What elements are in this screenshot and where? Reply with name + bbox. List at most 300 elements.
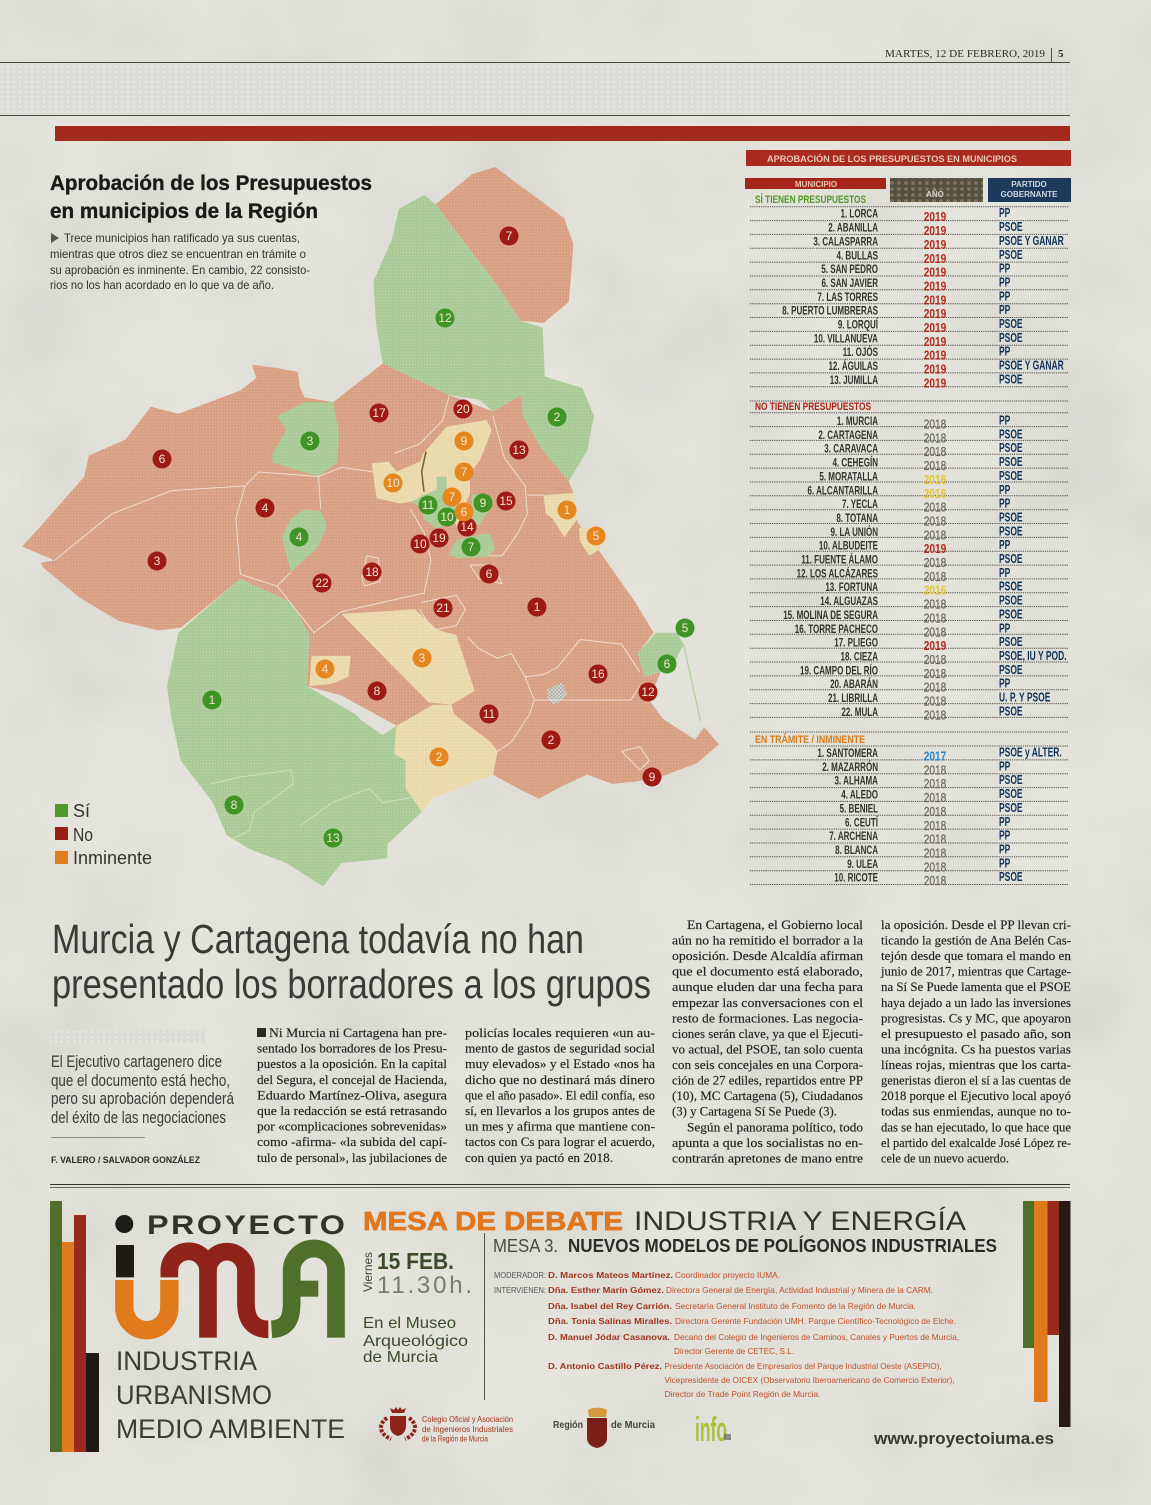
number markers: Inminente	[316, 432, 606, 766]
colegio text: de Ingenieros Industriales	[422, 1425, 513, 1434]
governing parties: PP	[999, 539, 1010, 553]
governing parties: PP	[999, 843, 1010, 857]
municipality names: 8. PUERTO LUMBRERAS	[782, 305, 878, 318]
header: partido gobernante: GOBERNANTE	[1001, 190, 1058, 199]
article column 4: cele de un nuevo acuerdo.	[881, 1150, 1009, 1165]
number markers: No: 19	[432, 531, 446, 545]
map legend: Sí	[73, 801, 90, 821]
governing parties: PSOE	[999, 580, 1023, 594]
municipality names: 8. TOTANA	[836, 513, 878, 525]
map intro text: Trece municipios han ratificado ya sus cuentas,	[64, 231, 300, 245]
article subhead: del éxito de las negociaciones	[51, 1109, 226, 1127]
municipality names: 6. ALCANTARILLA	[807, 485, 878, 498]
article column 2: policías locales requieren «un au-	[465, 1025, 655, 1040]
municipality names: 6. CEUTÍ	[845, 817, 878, 830]
municipality names: 10. ALBUDEITE	[819, 540, 878, 553]
municipality names: 2. ABANILLA	[828, 222, 878, 235]
number markers: No: 11	[483, 707, 496, 721]
budget years: 2018	[924, 791, 946, 805]
budget years: 2019	[924, 362, 947, 377]
number markers: Inminente: 2	[436, 750, 443, 764]
number markers: Sí: 9	[480, 496, 487, 510]
municipality names: 12. ÁGUILAS	[828, 361, 878, 374]
logo: región de murcia	[553, 1408, 655, 1448]
article column 4: generistas dieron el sí a las cuentas de	[881, 1073, 1071, 1088]
byline: F. VALERO / SALVADOR GONZÁLEZ	[51, 1155, 200, 1166]
article column 1: como -afirma- «la subida del capí-	[257, 1134, 447, 1149]
governing parties: PP	[999, 345, 1010, 359]
governing parties: PP	[999, 304, 1010, 318]
municipal borders	[54, 395, 649, 840]
number markers: Inminente: 9	[461, 434, 468, 448]
logo: colegio de ingenieros crest	[381, 1407, 415, 1439]
San Javier and San Pedro	[638, 633, 684, 677]
number markers: Sí: 1	[209, 693, 216, 707]
panel title: NUEVOS MODELOS DE POLÍGONOS INDUSTRIALES	[568, 1235, 997, 1256]
budget years: 2018	[924, 528, 946, 543]
municipality names: 13. FORTUNA	[825, 582, 878, 595]
municipality names: 16. TORRE PACHECO	[795, 624, 878, 636]
article headline: presentado los borradores a los grupos	[52, 961, 651, 1007]
governing parties: PSOE	[999, 788, 1023, 802]
municipality names: 2. MAZARRÓN	[822, 760, 878, 774]
article column 2: un mes y afirma que mantiene con-	[465, 1119, 655, 1134]
number markers: No: 21	[436, 601, 450, 615]
governing parties: PP	[999, 857, 1010, 871]
budget years: 2016	[924, 473, 947, 487]
budget years: 2018	[924, 445, 946, 460]
article column 3	[672, 917, 864, 1165]
budget years: 2016	[924, 584, 947, 598]
article column 1: puestos a la oposición. En la capital	[257, 1056, 447, 1071]
article column 4: tejón desde que tomara el mando en	[881, 948, 1071, 963]
table title bar: APROBACIÓN DE LOS PRESUPUESTOS EN MUNICIPIOS	[767, 153, 1017, 165]
Santomera	[543, 493, 578, 537]
event venue	[363, 1315, 468, 1366]
budget years: 2019	[924, 307, 947, 322]
governing parties: PSOE	[999, 608, 1023, 622]
article column 2: dicho que no destinará más dinero	[465, 1072, 655, 1087]
event date: 15 FEB.	[377, 1248, 454, 1274]
municipality names: 7. YECLA	[842, 499, 878, 512]
Abanilla	[521, 377, 594, 481]
municipality names: 12. LOS ALCÁZARES	[797, 568, 878, 581]
governing parties: PSOE y ALTER.	[999, 746, 1062, 760]
governing parties: PP	[999, 566, 1010, 580]
Mazarrón	[394, 705, 498, 812]
article column 2: que el año pasado». El edil confía, eso	[465, 1087, 655, 1102]
governing parties: PSOE	[999, 317, 1023, 332]
map intro text	[50, 231, 310, 292]
article subhead: que el documento está hecho,	[51, 1072, 230, 1090]
Lorca, Puerto Lumbreras, Águilas	[167, 579, 422, 886]
number markers: No: 3	[154, 554, 161, 568]
speakers: Dña. Esther Marín Gómez.	[548, 1285, 664, 1295]
speakers: D. Manuel Jódar Casanova.	[548, 1332, 670, 1342]
Jumilla	[374, 195, 545, 411]
municipality names: 5. MORATALLA	[819, 471, 878, 484]
budget years: 2018	[924, 570, 946, 584]
logo: proyecto iuma: PROYECTO	[147, 1210, 345, 1240]
logo: región de murcia: Región	[553, 1420, 583, 1431]
number markers: Inminente: 7	[461, 465, 468, 479]
logo taglines	[116, 1346, 345, 1444]
municipality names: 3. ALHAMA	[835, 775, 878, 788]
number markers: No: 17	[372, 406, 386, 420]
number markers: Inminente: 6	[461, 505, 468, 519]
budget years: 2019	[924, 639, 947, 653]
page header: halftone band, rules, date and folio	[0, 48, 1070, 116]
article column 4: 2018 porque el Ejecutivo local apoyó	[881, 1088, 1071, 1103]
Yecla	[436, 167, 573, 323]
budget years: 2018	[924, 694, 946, 709]
logo: info	[695, 1411, 731, 1449]
number markers: No: 2	[548, 733, 555, 747]
Las Torres	[448, 533, 495, 558]
budget years: 2018	[924, 805, 946, 819]
number markers: No: 13	[512, 443, 526, 457]
number markers: No: 18	[365, 565, 379, 579]
page number: 5	[1058, 48, 1064, 60]
budget years: 2019	[924, 542, 947, 557]
speakers: Director de Trade Point Región de Murcia.	[664, 1390, 820, 1399]
municipality names: 10. VILLANUEVA	[814, 333, 878, 346]
governing parties: U. P. Y PSOE	[999, 691, 1050, 705]
municipality names: 1. MURCIA	[837, 416, 878, 428]
speakers: Directora Gerente Fundación UMH. Parque Científico-Tecnológico de Elche.	[675, 1317, 956, 1326]
article subhead: El Ejecutivo cartagenero dice	[51, 1053, 222, 1071]
colegio text: Colegio Oficial y Asociación	[422, 1415, 513, 1424]
article headline: Murcia y Cartagena todavía no han	[52, 916, 584, 962]
speakers: D. Marcos Mateos Martínez.	[548, 1270, 673, 1280]
article column 3: Según el panorama político, todo	[687, 1119, 863, 1134]
municipality names: 20. ABARÁN	[830, 679, 878, 692]
budget years: 2017	[924, 749, 946, 764]
municipality names: 4. ALEDO	[841, 789, 878, 802]
governing parties: PSOE Y GANAR	[999, 234, 1064, 248]
article column 2: con quien ya pactó en 2018.	[465, 1150, 613, 1165]
logo: región de murcia: de Murcia	[611, 1420, 655, 1431]
municipality names: 17. PLIEGO	[834, 637, 878, 650]
governing parties: PP	[999, 262, 1010, 276]
section heading: en trámite: EN TRÁMITE / INMINENTE	[755, 733, 865, 746]
budget years: 2019	[924, 265, 947, 280]
municipality names: 19. CAMPO DEL RÍO	[800, 665, 878, 678]
number markers: No: 15	[499, 494, 513, 508]
article column 4: ticando la gestión de Ana Belén Cas-	[881, 933, 1071, 948]
budget years: 2018	[924, 819, 946, 833]
municipality names: 9. LA UNIÓN	[831, 525, 878, 539]
governing parties: PSOE	[999, 636, 1023, 650]
governing parties: PSOE	[999, 221, 1023, 235]
governing parties: PSOE	[999, 442, 1023, 456]
budget years: 2019	[924, 224, 947, 238]
article column 3: empezar las conversaciones con el	[672, 995, 863, 1010]
municipality names: 6. SAN JAVIER	[821, 278, 878, 290]
article column 3: (10), MC Cartagena (5), Ciudadanos	[672, 1088, 863, 1103]
speakers: Vicepresidente de OICEX (Observatorio Iberoamericano de Comercio Exterior),	[664, 1376, 954, 1385]
map title: Aprobación de los Presupuestos	[50, 172, 372, 195]
governing parties: PP	[999, 497, 1010, 511]
number markers: Sí	[202, 308, 694, 848]
municipality names: 2. CARTAGENA	[818, 430, 878, 442]
municipality names: 1. SANTOMERA	[817, 748, 878, 760]
municipality names: 5. SAN PEDRO	[821, 264, 878, 277]
number markers: Sí: 10	[440, 510, 454, 524]
governing parties	[999, 207, 1067, 885]
number markers: Sí: 11	[422, 498, 435, 512]
right colour stripes	[1023, 1201, 1070, 1427]
article subhead: pero su aprobación dependerá	[51, 1090, 235, 1108]
municipality names: 3. CALASPARRA	[813, 236, 878, 249]
article column 3: con seis concejales en una Corpora-	[672, 1057, 863, 1072]
number markers: No: 1	[534, 600, 541, 614]
logo taglines: URBANISMO	[116, 1380, 272, 1410]
number markers: Inminente: 3	[419, 651, 426, 665]
municipality names: 22. MULA	[841, 707, 878, 719]
municipality names: 11. OJÓS	[843, 346, 878, 360]
article column 4: líneas rojas, mientras que los carta-	[881, 1057, 1071, 1072]
event venue: de Murcia	[363, 1349, 438, 1366]
event venue: En el Museo	[363, 1315, 456, 1332]
Lorquí	[472, 493, 487, 525]
logo: info: info	[695, 1411, 727, 1449]
header: municipio: MUNICIPIO	[795, 180, 837, 189]
municipality names: 5. BENIEL	[840, 803, 878, 816]
budget years: 2018	[924, 667, 946, 681]
speakers: D. Antonio Castillo Pérez.	[548, 1361, 662, 1371]
governing parties: PP	[999, 622, 1010, 636]
panel: advertisement	[50, 1184, 1070, 1452]
number markers: Sí: 6	[664, 657, 671, 671]
Bullas	[282, 509, 327, 572]
budget years: 2019	[924, 238, 947, 252]
number markers: No: 6	[486, 567, 493, 581]
governing parties: PSOE	[999, 373, 1023, 387]
governing parties: PSOE	[999, 663, 1023, 677]
article column 3: resto de formaciones. Las negocia-	[672, 1010, 863, 1025]
budget years: 2019	[924, 321, 947, 335]
panel title: MESA 3.	[493, 1236, 558, 1256]
article column 3: contrarán apretones de mano entre	[672, 1150, 863, 1165]
Beniel	[579, 528, 601, 556]
central municipalities detail	[372, 420, 495, 558]
article column 3: aún no ha remitido el borrador a la	[672, 933, 863, 948]
map intro text: rios no los han acordado en lo que va de año.	[50, 278, 274, 292]
article column 1: tulo de personal», las jubilaciones de	[257, 1150, 447, 1165]
article column 3: vo actual, del PSOE, tan solo cuenta	[672, 1042, 863, 1056]
Aledo	[309, 656, 351, 686]
budget years	[924, 210, 947, 889]
number markers: Sí: 7	[468, 540, 475, 554]
budget years: 2018	[924, 500, 946, 515]
speakers: Decano del Colegio de Ingenieros de Caminos, Canales y Puertos de Murcia,	[674, 1333, 959, 1342]
article column 2: tactos con Cs para lograr el acuerdo,	[465, 1134, 655, 1149]
municipality names: 7. LAS TORRES	[817, 292, 878, 304]
municipality names: 9. LORQUÍ	[838, 319, 878, 332]
number markers: Inminente: 5	[593, 529, 600, 543]
municipality names: 18. CIEZA	[840, 651, 878, 664]
municipality names: 10. RICOTE	[834, 872, 878, 885]
governing parties: PP	[999, 760, 1010, 774]
map title: en municipios de la Región	[50, 200, 318, 223]
article column 4: el presupuesto el pasado año, son	[881, 1026, 1072, 1041]
number markers: Sí: 8	[231, 798, 238, 812]
article column 3: ciones serán clave, ya que el Ejecuti-	[672, 1026, 863, 1041]
article column 1: Ni Murcia ni Cartagena han pre-	[269, 1025, 447, 1040]
number markers: Inminente: 7	[449, 490, 456, 504]
budget years: 2018	[924, 874, 946, 889]
municipality names: 9. ULEA	[847, 859, 878, 871]
number markers: Sí: 13	[326, 831, 340, 845]
article column 3: apunta a que los socialistas no en-	[672, 1135, 863, 1150]
map legend	[55, 801, 152, 868]
header: año	[890, 178, 983, 202]
speakers: Coordinador proyecto IUMA.	[675, 1271, 780, 1280]
budget years: 2018	[924, 556, 946, 570]
municipality names: 7. ARCHENA	[829, 831, 878, 844]
budget years: 2019	[924, 210, 947, 225]
governing parties: PSOE	[999, 525, 1023, 539]
budget years: 2018	[924, 832, 946, 847]
article column 4: progresistas. Cs y MC, que apoyaron	[881, 1010, 1071, 1025]
budget years: 2018	[924, 653, 946, 667]
article column 4: el partido del exalcalde José López re-	[881, 1135, 1071, 1150]
budget years: 2019	[924, 335, 947, 349]
budget years: 2018	[924, 708, 946, 723]
number markers: No	[148, 226, 662, 786]
budget years: 2018	[924, 860, 946, 875]
article column 3: oposición. Desde Alcaldía afirman	[672, 948, 864, 963]
gray enclave	[547, 682, 567, 705]
map of municipalities	[22, 167, 719, 886]
budget years: 2019	[924, 279, 947, 294]
governing parties: PP	[999, 290, 1010, 304]
header: partido gobernante: PARTIDO	[1011, 180, 1047, 189]
speakers: Directora General de Energía, Actividad Industrial y Minera de la CARM.	[666, 1286, 933, 1295]
logo taglines: INDUSTRIA	[116, 1346, 257, 1376]
municipality names: 4. CEHEGÍN	[832, 457, 878, 470]
base: all territory without approved budgets	[22, 363, 719, 799]
governing parties: PSOE	[999, 705, 1023, 719]
header: municipio	[745, 178, 886, 189]
article column 4: una incógnita. Cs ha puestos varias	[881, 1042, 1071, 1056]
article column 4: junio de 2017, mientras que Cartage-	[880, 964, 1071, 979]
article column 2: muy elevados» y el Estado «nos ha	[465, 1056, 655, 1071]
article column 4: das se han ejecutado, lo que hace que	[881, 1119, 1071, 1134]
ad heading	[363, 1206, 966, 1236]
speakers: Secretaría General Instituto de Fomento de la Región de Murcia.	[675, 1302, 916, 1311]
municipality names: 11. FUENTE ÁLAMO	[801, 554, 878, 567]
number markers: Sí: 12	[438, 311, 452, 325]
governing parties: PP	[999, 483, 1010, 497]
governing parties: PSOE	[999, 511, 1023, 525]
governing parties: PSOE	[999, 331, 1023, 345]
budget years: 2018	[924, 777, 946, 792]
speakers: Presidente Asociación de Empresarios del Parque Industrial Oeste (ASEPIO),	[664, 1362, 942, 1371]
number markers: No: 16	[591, 667, 605, 681]
number markers: Sí: 5	[682, 621, 689, 635]
article column 3: (3) y Cartagena Sí Se Puede (3).	[672, 1104, 837, 1119]
speakers: Dña. Tonia Salinas Miralles.	[548, 1316, 672, 1326]
speakers: MODERADOR:	[494, 1271, 546, 1280]
header: año: AÑO	[926, 190, 944, 199]
governing parties: PSOE	[999, 552, 1023, 567]
number markers: No: 12	[641, 685, 655, 699]
speakers: Director Gerente de CETEC, S.L.	[674, 1347, 794, 1356]
speakers	[494, 1270, 959, 1399]
Calasparra	[273, 402, 339, 477]
governing parties: PP	[999, 677, 1010, 691]
budget years: 2018	[924, 597, 946, 612]
colegio text: de la Región de Murcia	[422, 1434, 488, 1444]
budget years: 2018	[924, 681, 946, 695]
governing parties: PSOE	[999, 801, 1023, 815]
article column 3: que el documento está elaborado,	[672, 964, 863, 979]
governing parties: PSOE	[999, 248, 1023, 262]
number markers: Sí: 2	[554, 410, 561, 424]
budget years: 2018	[924, 763, 946, 778]
speakers: Dña. Isabel del Rey Carrión.	[548, 1301, 672, 1311]
Mar Menor line	[684, 644, 701, 721]
governing parties: PP	[999, 276, 1010, 290]
event date: 11.30h.	[377, 1272, 472, 1299]
governing parties: PSOE	[999, 871, 1023, 885]
governing parties: PSOE Y GANAR	[999, 359, 1064, 373]
ad heading: INDUSTRIA Y ENERGÍA	[634, 1206, 966, 1236]
number markers: Sí: 3	[307, 434, 314, 448]
budget years: 2018	[924, 514, 946, 529]
municipality names: 14. ALGUAZAS	[820, 596, 878, 609]
panel: budget table	[745, 150, 1071, 889]
number markers: No: 6	[159, 452, 166, 466]
map intro text: su aprobación es inminente. En cambio, 22 consisto-	[50, 263, 310, 277]
number markers: Inminente: 10	[386, 476, 400, 490]
logo: proyecto iuma	[115, 1210, 345, 1338]
section heading: no tienen presupuestos: NO TIENEN PRESUPUESTOS	[755, 401, 871, 413]
governing parties: PSOE, IU Y POD.	[999, 649, 1067, 664]
governing parties: PSOE	[999, 428, 1023, 442]
budget years: 2019	[924, 376, 947, 391]
article column 1: del Segura, el concejal de Hacienda,	[257, 1072, 447, 1087]
budget years: 2018	[924, 625, 946, 640]
article column 1: por «complicaciones sobrevenidas»	[257, 1119, 447, 1134]
municipality names: 15. MOLINA DE SEGURA	[783, 610, 878, 622]
article column 4: todas sus enmiendas, aunque no to-	[881, 1104, 1071, 1119]
table title bar	[746, 150, 1071, 166]
Alhama	[341, 609, 475, 705]
municipality names: 21. LIBRILLA	[828, 693, 878, 705]
municipality names: 13. JUMILLA	[830, 375, 878, 387]
left colour stripes	[50, 1201, 99, 1452]
governing parties: PP	[999, 207, 1010, 221]
Ojós and Villanueva	[412, 477, 457, 528]
governing parties: PSOE	[999, 774, 1023, 788]
article column 4: la oposición. Desde el PP llevan cri-	[881, 917, 1071, 932]
budget years: 2018	[924, 846, 946, 861]
article column 4: na Sí Se Puede lamenta que el PSOE	[881, 979, 1071, 994]
budget years: 2018	[924, 431, 946, 446]
central yellow area: Ricote, Ulea, Archena, Ceutí	[372, 420, 492, 527]
budget years: 2018	[924, 611, 946, 626]
red top bar	[55, 126, 1070, 141]
event venue: Arqueológico	[363, 1333, 468, 1350]
map title	[50, 172, 372, 223]
budget years: 2018	[924, 417, 946, 432]
municipality names: 4. BULLAS	[836, 250, 878, 263]
number markers: No: 22	[315, 576, 329, 590]
article column 4: haya dejado a un lado las inversiones	[881, 995, 1071, 1010]
